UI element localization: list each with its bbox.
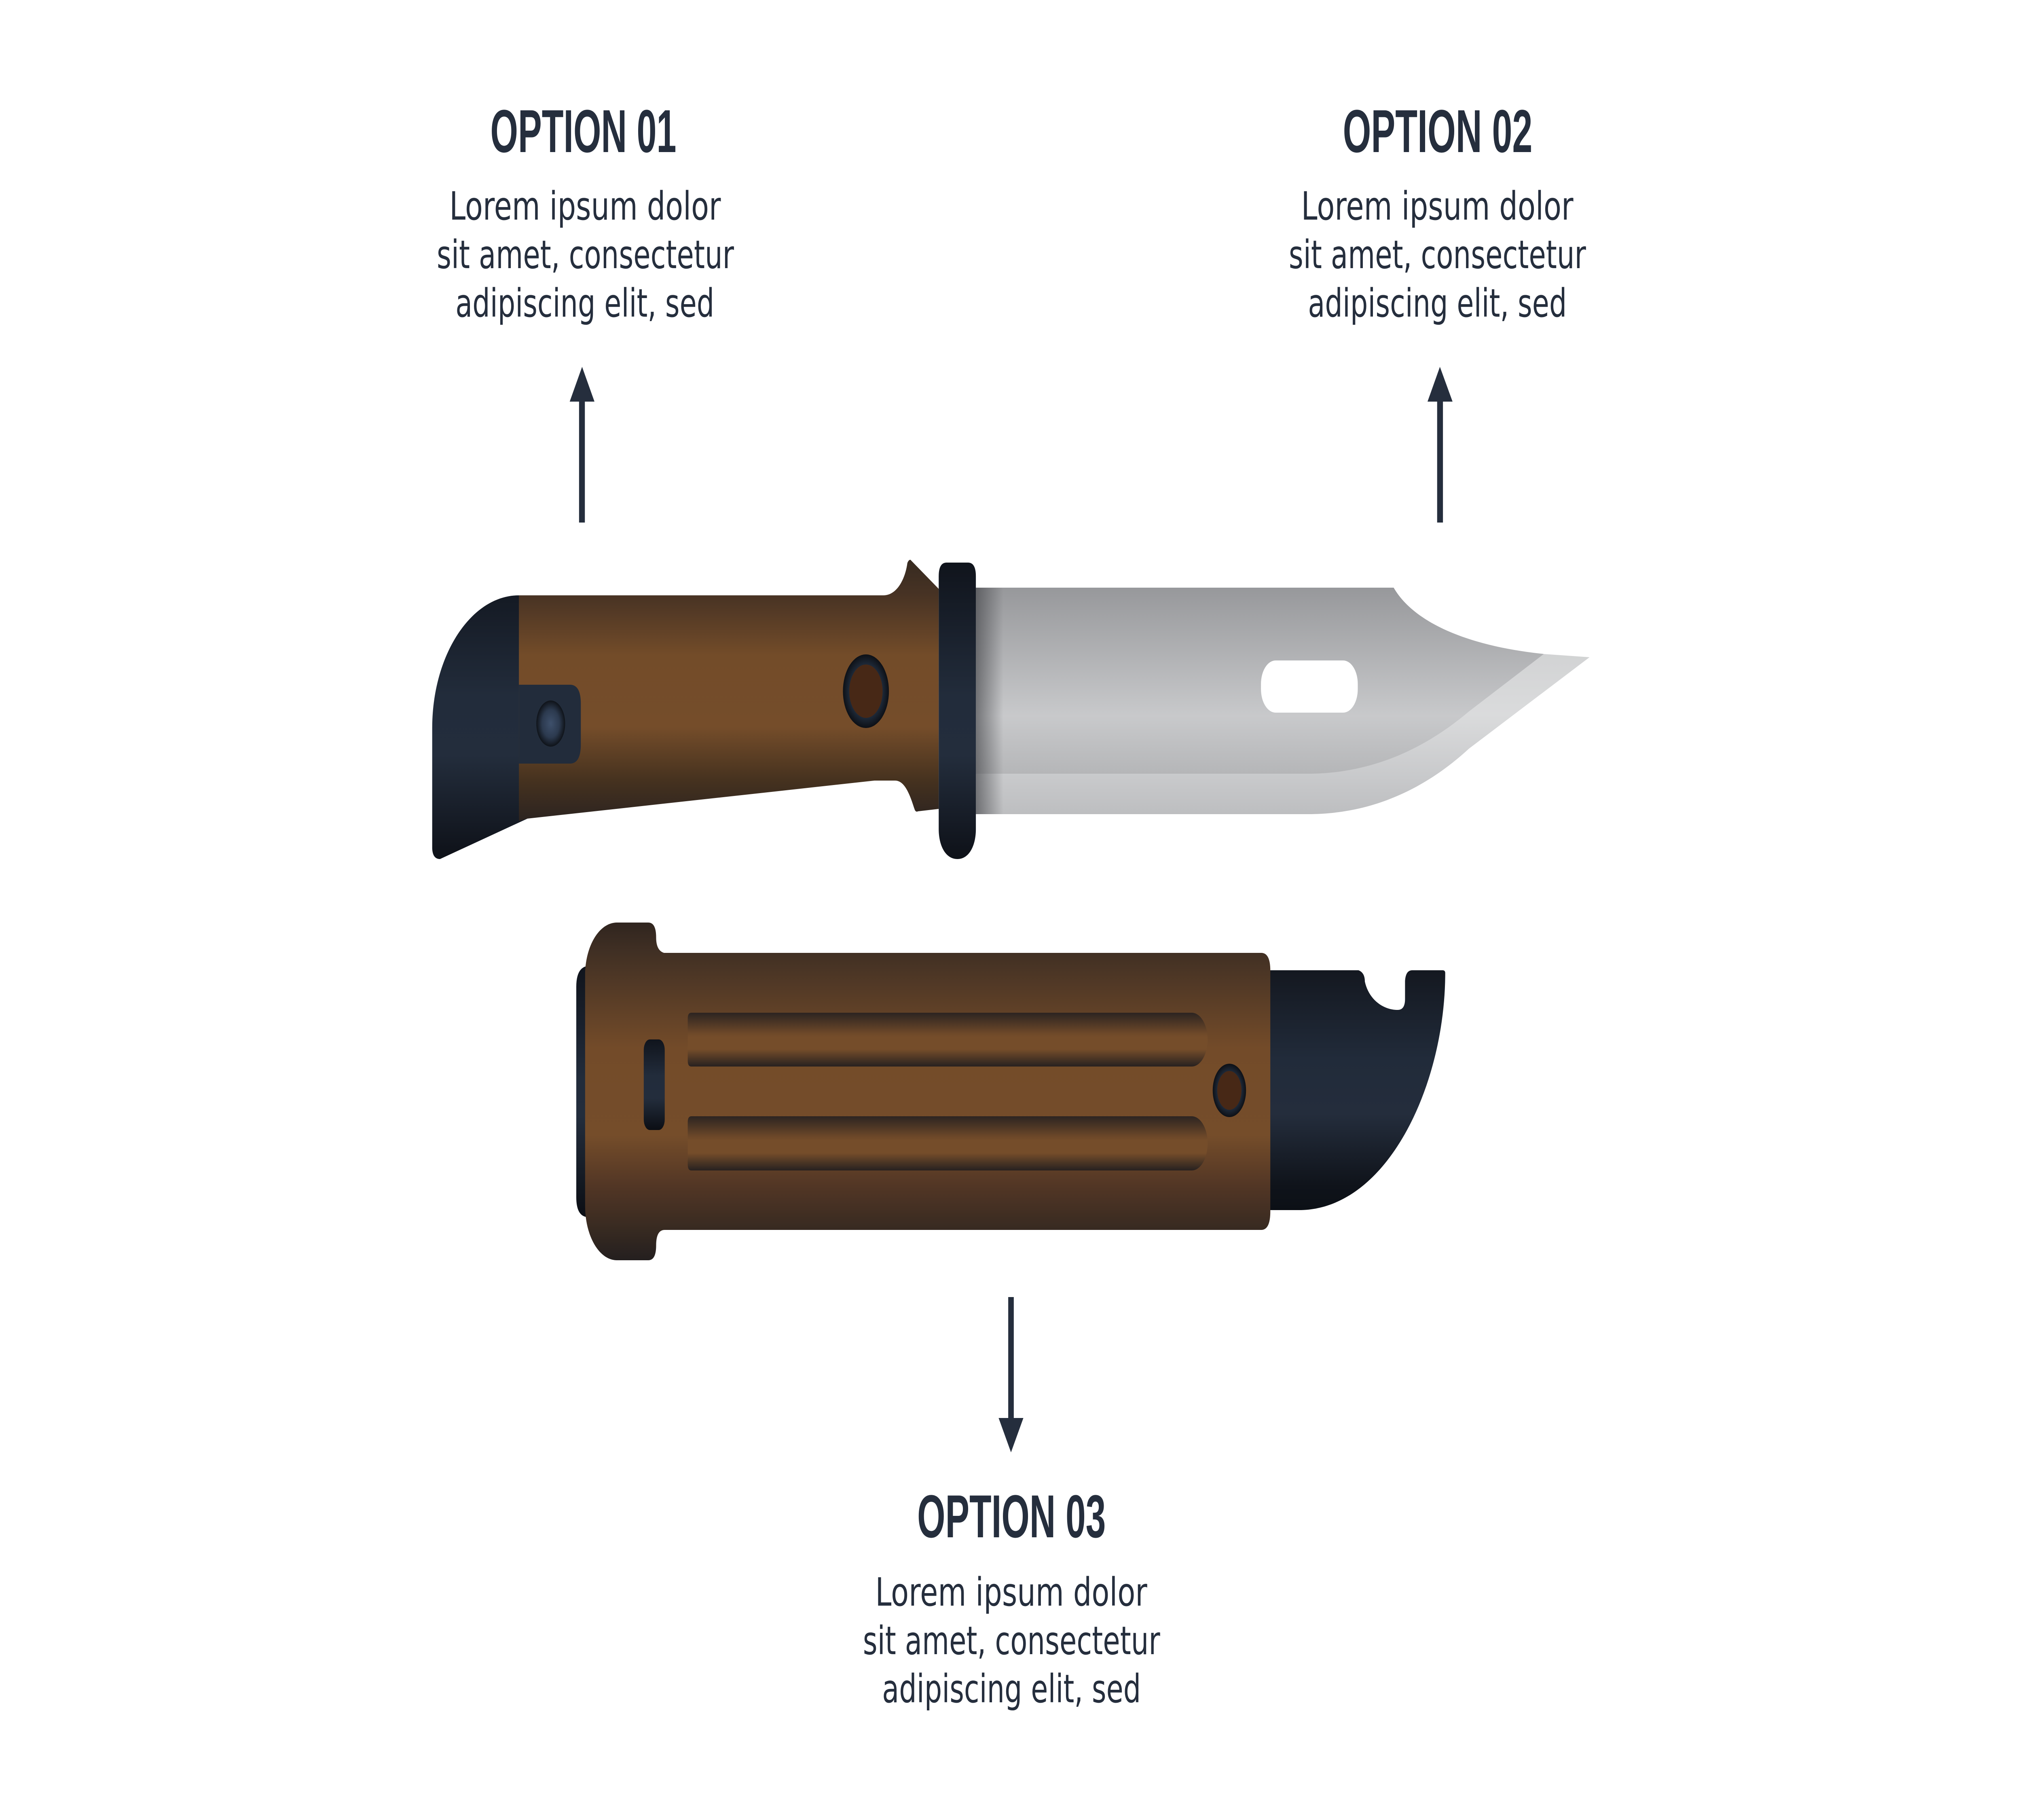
option 03 [863, 1297, 1160, 1712]
text: option 03 description: sit amet, consectetur [863, 1618, 1160, 1663]
arrow: option 01 up [570, 367, 594, 523]
text: option 02 description: adipiscing elit, sed [1308, 281, 1567, 326]
blade cutting edge [976, 654, 1590, 814]
sheath body [585, 923, 1270, 1260]
handle rivet [843, 654, 889, 728]
handle [519, 560, 939, 821]
text: option 03 description: Lorem ipsum dolor [875, 1570, 1147, 1615]
text: option 02 description [1289, 184, 1586, 326]
blade main face [976, 588, 1544, 774]
knife [432, 560, 1590, 859]
upper groove [688, 1013, 1208, 1067]
heading: option 03: OPTION 03 [917, 1482, 1106, 1550]
pommel screw [536, 700, 565, 747]
arrow: option 03 down [998, 1297, 1024, 1452]
text: option 01 description: Lorem ipsum dolor [449, 184, 721, 229]
heading: option 01: OPTION 01 [490, 97, 676, 165]
sheath [576, 923, 1445, 1260]
sheath slot [644, 1039, 665, 1130]
text: option 01 description: sit amet, consectetur [437, 232, 734, 277]
arrow: option 02 up [1428, 367, 1453, 523]
sheath tip [1264, 970, 1445, 1210]
option 01 [437, 97, 734, 523]
text: option 01 description [437, 184, 734, 326]
text: option 01 description: adipiscing elit, sed [455, 281, 714, 326]
guard [939, 563, 976, 859]
guard shadow [976, 588, 1003, 814]
pommel tab [519, 685, 581, 764]
blade slot [1261, 660, 1358, 713]
text: option 02 description: sit amet, consectetur [1289, 232, 1586, 277]
heading: option 02: OPTION 02 [1343, 97, 1532, 165]
sheath end cap [576, 966, 591, 1217]
option 02 [1289, 97, 1586, 523]
text: option 03 description [863, 1570, 1160, 1712]
lower groove [688, 1116, 1208, 1170]
text: option 02 description: Lorem ipsum dolor [1301, 184, 1574, 229]
text: option 03 description: adipiscing elit, sed [882, 1666, 1141, 1712]
pommel [432, 595, 531, 859]
sheath rivet [1213, 1064, 1246, 1117]
